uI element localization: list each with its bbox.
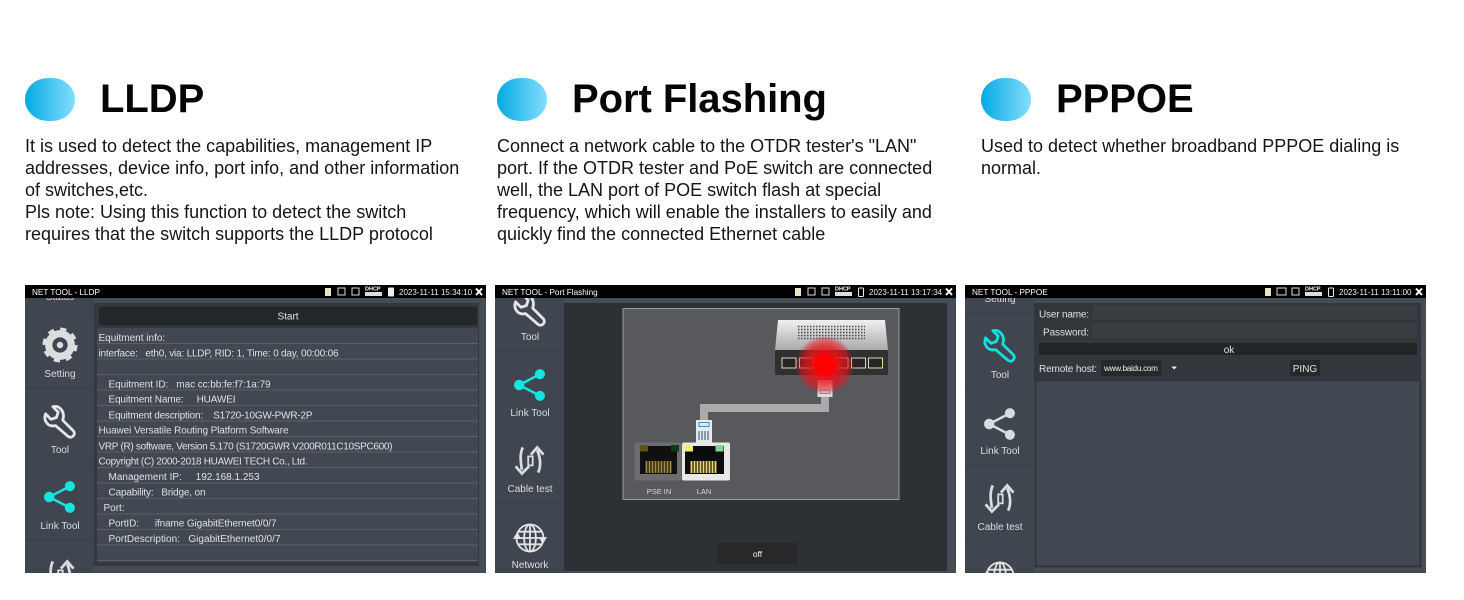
field: remote host xyxy=(1101,360,1161,376)
button: off: off xyxy=(753,549,763,559)
sidebar: PPPOE menu: Setting xyxy=(984,294,1016,305)
status bar: LLDP: NET TOOL - LLDP xyxy=(32,288,100,297)
text: LLDP description: of switches,etc. xyxy=(25,180,148,200)
text: LLDP results: Equitment Name: HUAWEI xyxy=(108,394,236,406)
sidebar: LLDP menu: Tool xyxy=(51,445,69,456)
form: PPPOE inputs: Password: xyxy=(1043,328,1089,338)
form: PPPOE inputs xyxy=(1034,303,1421,380)
text: PPPOE description: normal. xyxy=(981,158,1041,178)
text: LLDP description: requires that the switch supports the LLDP protocol xyxy=(25,224,433,244)
sidebar: PPPOE menu: Tool xyxy=(991,370,1009,381)
text: LLDP results: Equitment info: xyxy=(98,333,165,344)
status bar: PPPOE xyxy=(965,285,1426,298)
label: LAN: LAN xyxy=(697,487,711,496)
sidebar: Port Flashing menu xyxy=(495,294,564,573)
panel: Port Flashing screenshot xyxy=(495,285,956,573)
sidebar: Port Flashing menu: Cable test xyxy=(507,484,553,495)
icon: cable xyxy=(704,396,825,420)
icon: PPPOE bullet xyxy=(981,78,1031,121)
sidebar: PPPOE menu xyxy=(965,294,1034,590)
status bar: PPPOE: 2023-11-11 13:11:00 xyxy=(1339,288,1412,297)
button: Start: Start xyxy=(277,312,299,322)
text: LLDP results: interface: eth0, via: LLDP, RID: 1, Time: 0 day, 00:00:06 xyxy=(98,348,339,360)
text: LLDP results: Equitment description: S1720-10GW-PWR-2P xyxy=(108,410,313,422)
text: LLDP results xyxy=(98,333,392,545)
text: LLDP description: It is used to detect the capabilities, management IP xyxy=(25,136,432,156)
sidebar: LLDP menu: Link Tool xyxy=(40,521,80,532)
text: Port Flashing description: well, the LAN port of POE switch flash at special xyxy=(497,180,881,200)
text: LLDP results: PortDescription: GigabitEthernet0/0/7 xyxy=(108,534,281,545)
status bar: Port Flashing: 2023-11-11 13:17:34 xyxy=(869,288,943,297)
icon: PSE IN port xyxy=(634,442,682,480)
status bar: LLDP: 2023-11-11 15:34:10 xyxy=(399,288,473,297)
heading: LLDP: LLDP xyxy=(100,77,204,121)
text: LLDP description: Pls note: Using this function to detect the switch xyxy=(25,202,406,222)
text: LLDP results: Huawei Versatile Routing Platform Software xyxy=(98,426,289,436)
icon: PoE switch xyxy=(775,320,888,375)
text: LLDP results: Copyright (C) 2000-2018 HUAWEI TECH Co., Ltd. xyxy=(98,456,308,468)
icon: LLDP bullet xyxy=(25,78,75,121)
text: PPPOE description xyxy=(981,136,1399,178)
icon: flashing red light xyxy=(796,336,854,394)
text: PPPOE description: Used to detect whether broadband PPPOE dialing is xyxy=(981,136,1399,156)
status bar: Port Flashing xyxy=(495,285,956,298)
status bar: PPPOE: NET TOOL - PPPOE xyxy=(972,288,1048,297)
text: Port Flashing description: quickly find the connected Ethernet cable xyxy=(497,224,825,244)
text: LLDP results: PortID: ifname GigabitEthernet0/0/7 xyxy=(108,518,277,530)
text: LLDP results: VRP (R) software, Version 5.170 (S1720GWR V200R011C10SPC600) xyxy=(98,442,392,452)
heading: Port Flashing: Port Flashing xyxy=(572,77,827,121)
icon: switch-side connector xyxy=(818,380,832,397)
form: PPPOE inputs: Remote host: xyxy=(1039,364,1097,375)
text: LLDP description xyxy=(25,136,459,244)
text: LLDP results: Management IP: 192.168.1.253 xyxy=(108,472,260,483)
text: LLDP results: Port: xyxy=(104,503,125,514)
panel: LLDP content xyxy=(94,298,486,573)
status bar: PPPOE: DHCP xyxy=(1305,286,1321,292)
status bar: LLDP xyxy=(25,285,486,298)
text: Port Flashing description: port. If the OTDR tester and PoE switch are connected xyxy=(497,158,932,178)
button: PING xyxy=(1290,360,1320,376)
button: ok xyxy=(1039,343,1417,356)
panel: LLDP screenshot xyxy=(25,285,486,573)
text: Port Flashing description: frequency, which will enable the installers to easily and xyxy=(497,202,932,222)
button: PING: PING xyxy=(1293,364,1317,375)
sidebar: PPPOE menu: Cable test xyxy=(977,522,1023,533)
text: LLDP results: Equitment ID: mac cc:bb:fe:f7:1a:79 xyxy=(108,380,271,390)
text: Port Flashing description xyxy=(497,136,932,244)
status bar: Port Flashing: DHCP xyxy=(835,286,851,292)
button: ok: ok xyxy=(1224,345,1235,356)
button: off xyxy=(717,543,798,564)
sidebar: Port Flashing menu: Network xyxy=(512,560,549,571)
field: remote host: www.baidu.com xyxy=(1103,364,1158,373)
status bar: LLDP: DHCP xyxy=(365,286,381,292)
icon: LAN-side connector xyxy=(696,420,712,443)
text: Port Flashing description: Connect a network cable to the OTDR tester's "LAN" xyxy=(497,136,916,156)
sidebar: Port Flashing menu: Tool xyxy=(521,332,539,343)
button: Start xyxy=(99,307,477,325)
icon: LAN port xyxy=(682,442,730,480)
status bar: Port Flashing: NET TOOL - Port Flashing xyxy=(502,288,598,297)
diagram: switch connected to LAN port xyxy=(623,308,899,500)
text: LLDP results: Capability: Bridge, on xyxy=(108,488,206,498)
icon: Port Flashing bullet xyxy=(497,78,547,121)
form: PPPOE inputs: User name: xyxy=(1039,310,1089,320)
heading: PPPOE: PPPOE xyxy=(1056,77,1194,121)
sidebar: LLDP menu: Status xyxy=(46,292,74,303)
sidebar: Port Flashing menu: Link Tool xyxy=(510,408,550,419)
sidebar: PPPOE menu: Link Tool xyxy=(980,446,1020,457)
sidebar: LLDP menu xyxy=(25,292,94,588)
panel: PPPOE output area xyxy=(1036,380,1420,566)
text: LLDP description: addresses, device info, port info, and other information xyxy=(25,158,459,178)
panel: main dark area xyxy=(564,303,947,571)
panel: PPPOE screenshot xyxy=(965,285,1426,573)
sidebar: LLDP menu: Setting xyxy=(44,369,76,380)
label: PSE IN: PSE IN xyxy=(647,487,671,496)
